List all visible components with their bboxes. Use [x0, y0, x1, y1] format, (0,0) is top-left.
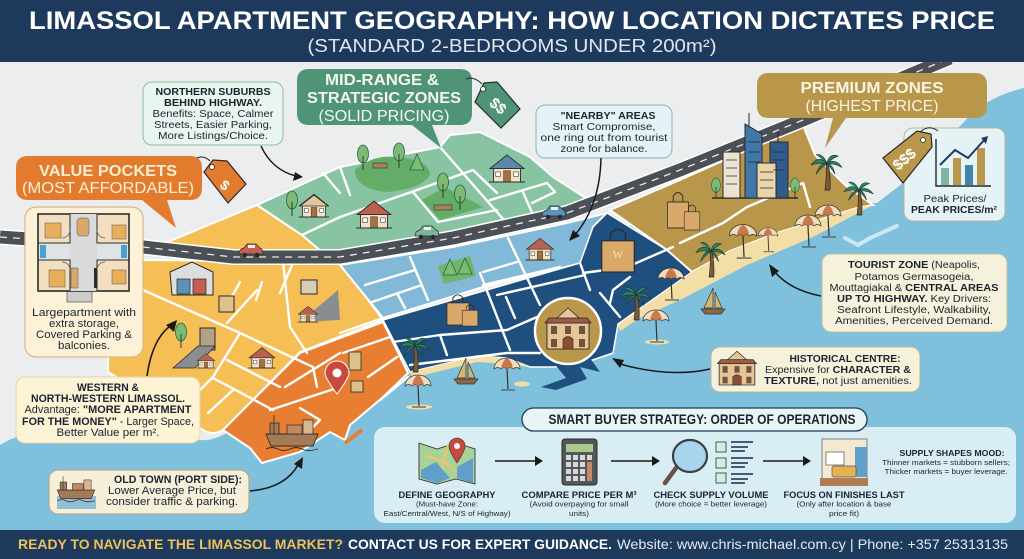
step labels: (Only after location & base — [796, 500, 892, 508]
icons: old town — [266, 352, 363, 450]
callout: nearby areas: one ring out from tourist — [540, 133, 668, 144]
callout: western limassol: NORTH-WESTERN LIMASSOL. — [31, 393, 185, 405]
callout: western limassol: Better Value per m². — [56, 427, 160, 439]
arrow: historical centre to building — [612, 358, 710, 373]
callout: tourist zone: UP TO HIGHWAY. Key Drivers: — [837, 294, 991, 305]
old town port — [340, 400, 362, 443]
floor plan diagram — [38, 214, 129, 302]
zone: harbour piers — [541, 358, 600, 390]
icon: value price tag — [197, 157, 246, 203]
icon: historical centre building — [535, 298, 601, 364]
arrow: western callout to zone — [147, 320, 177, 376]
footer banner: READY TO NAVIGATE THE LIMASSOL MARKET? — [18, 536, 343, 552]
callout: northern suburbs — [143, 82, 283, 145]
title: LIMASSOL APARTMENT GEOGRAPHY: HOW LOCATION DICTATES PRICE — [29, 7, 995, 35]
step labels: (Avoid overpaying for small — [530, 500, 629, 508]
zone: old town — [223, 322, 408, 463]
arrow: northern suburbs to zone — [261, 146, 303, 181]
bar chart icon — [936, 136, 991, 186]
footer banner: CONTACT US FOR EXPERT GUIDANCE. — [348, 536, 612, 552]
step labels: CHECK SUPPLY VOLUME — [654, 490, 768, 501]
icon: calculator — [562, 439, 597, 485]
callout: northern suburbs: Benefits: Space, Calmer — [152, 109, 274, 120]
callout: historical centre: HISTORICAL CENTRE: — [790, 354, 900, 365]
icon: map — [419, 438, 475, 484]
heading: value pockets: (MOST AFFORDABLE) — [22, 180, 194, 197]
callout: old town — [49, 470, 249, 514]
arrow: step 3 to 4 — [763, 456, 811, 466]
callout: peak prices: Peak Prices/ — [924, 194, 987, 205]
heading: mid-range zones: MID-RANGE & — [325, 72, 439, 89]
callout: northern suburbs: BEHIND HIGHWAY. — [164, 98, 262, 109]
panel: floor plan card: Largepartment with — [32, 307, 136, 319]
text: supply shapes mood: Thicker markets = buyer leverage. — [884, 467, 1008, 476]
icons: green zone parks and homes — [286, 143, 525, 228]
footer banner: Website: www.chris-michael.com.cy | Phone: +357 25313135 — [617, 536, 1008, 552]
callout: tourist zone: Mouttagiakal & CENTRAL AREAS — [830, 283, 999, 294]
step labels: (Must-have Zone: — [416, 500, 478, 508]
icon: mid-range price tag — [466, 78, 520, 128]
text: supply shapes mood: Thinner markets = stubborn sellers; — [882, 458, 1010, 467]
callout: nearby areas: zone for balance. — [560, 144, 648, 155]
callout: peak prices — [904, 128, 1005, 221]
icons: nearby zone — [438, 238, 554, 284]
step labels: price fit) — [829, 509, 860, 518]
heading: premium zones — [757, 73, 987, 148]
callout: northern suburbs: NORTHERN SUBURBS — [156, 87, 271, 98]
icons: central zone — [399, 229, 725, 410]
icon: magnifier and checklist — [665, 440, 753, 483]
panel: floor plan card: balconies. — [58, 340, 110, 352]
zone: nearby areas — [340, 213, 607, 318]
text: supply shapes mood: SUPPLY SHAPES MOOD: — [900, 448, 1005, 458]
step labels: DEFINE GEOGRAPHY — [398, 490, 496, 501]
subtitle: (STANDARD 2-BEDROOMS UNDER 200m²) — [308, 36, 716, 56]
callout: western limassol — [16, 377, 200, 443]
callout: tourist zone: TOURIST ZONE (Neapolis, — [848, 260, 980, 271]
heading: mid-range zones: STRATEGIC ZONES — [307, 90, 461, 107]
zone: beach — [410, 205, 873, 378]
heading: premium zones: PREMIUM ZONES — [800, 80, 944, 97]
sea — [0, 88, 1024, 535]
callout: western limassol: FOR THE MONEY" - Larger Space, — [22, 416, 194, 428]
callout: western limassol: WESTERN & — [77, 382, 139, 394]
heading: mid-range zones — [297, 69, 472, 148]
icon: cars — [239, 206, 566, 257]
step labels: units) — [569, 509, 590, 518]
step labels: COMPARE PRICE PER M³ — [522, 490, 636, 501]
icons: central zone: W — [613, 249, 624, 261]
arrow: step 1 to 2 — [495, 456, 543, 466]
callout: tourist zone — [822, 254, 1007, 332]
header banner — [0, 0, 1024, 62]
arrow: old town to port — [250, 457, 303, 491]
zone: value pockets — [108, 205, 383, 433]
step labels: FOCUS ON FINISHES LAST — [784, 490, 905, 501]
callout: peak prices: PEAK PRICES/m² — [911, 205, 998, 216]
zone: central navy — [383, 213, 692, 372]
callout: old town: Lower Average Price, but — [108, 485, 236, 497]
step labels: East/Central/West, N/S of Highway) — [384, 509, 511, 518]
callout: old town: consider traffic & parking. — [106, 496, 238, 508]
callout: tourist zone: Seafront Lifestyle, Walkability, — [837, 305, 991, 316]
callout: tourist zone: Potamos Germasogeia, — [854, 272, 974, 283]
arrow: step 2 to 3 — [611, 456, 660, 466]
icon: premium price tag: $$$ — [890, 145, 920, 174]
arrow: tourist zone to coast — [769, 264, 821, 296]
heading: mid-range zones: (SOLID PRICING) — [318, 108, 450, 125]
panel: floor plan card: extra storage, — [49, 318, 119, 330]
callout: old town: OLD TOWN (PORT SIDE): — [114, 474, 242, 486]
heading: strategy title — [522, 408, 867, 431]
heading: value pockets: VALUE POCKETS — [39, 163, 177, 180]
callout: nearby areas: "NEARBY" AREAS — [560, 111, 656, 122]
icons: premium skyline — [668, 113, 873, 277]
callout: historical centre: TEXTURE, not just amenities. — [764, 376, 912, 387]
map zones — [108, 125, 897, 463]
heading: strategy title: SMART BUYER STRATEGY: ORDER OF OPERATIONS — [548, 411, 856, 427]
heading: premium zones: (HIGHEST PRICE) — [806, 98, 938, 115]
icon: location pin — [325, 361, 349, 394]
text: supply shapes mood — [882, 448, 1010, 476]
icon: value price tag: $ — [217, 176, 233, 194]
callout: northern suburbs: Streets, Easier Parking, — [154, 120, 272, 131]
callout: northern suburbs: More Listings/Choice. — [158, 131, 268, 142]
callout: historical centre — [711, 347, 920, 392]
callout: tourist zone: Amenities, Perceived Demand. — [835, 316, 993, 327]
breakwater — [845, 226, 897, 245]
panel: floor plan card: Covered Parking & — [36, 329, 133, 341]
footer banner — [0, 530, 1024, 559]
callout: nearby areas: Smart Compromise, — [552, 122, 656, 133]
icons: value zone buildings — [170, 262, 340, 368]
callout: western limassol: Advantage: "MORE APARTMENT — [24, 404, 192, 416]
road network — [143, 147, 810, 427]
icon: finished room — [820, 439, 868, 486]
icon: premium price tag — [883, 128, 938, 183]
icon: mid-range price tag: $$ — [486, 95, 510, 119]
step labels — [384, 490, 905, 518]
panel: floor plan card — [25, 207, 143, 357]
heading: value pockets — [16, 156, 202, 228]
zone: mid-range northern suburbs — [257, 132, 592, 256]
callout: historical centre: Expensive for CHARACTER & — [765, 365, 911, 376]
zone: premium gold — [610, 125, 873, 272]
panel: smart buyer strategy — [374, 408, 1016, 523]
arrow: nearby to zone — [569, 158, 601, 241]
callout: nearby areas — [536, 105, 672, 158]
step labels: (More choice = better leverage) — [655, 500, 768, 508]
highway — [0, 58, 950, 257]
